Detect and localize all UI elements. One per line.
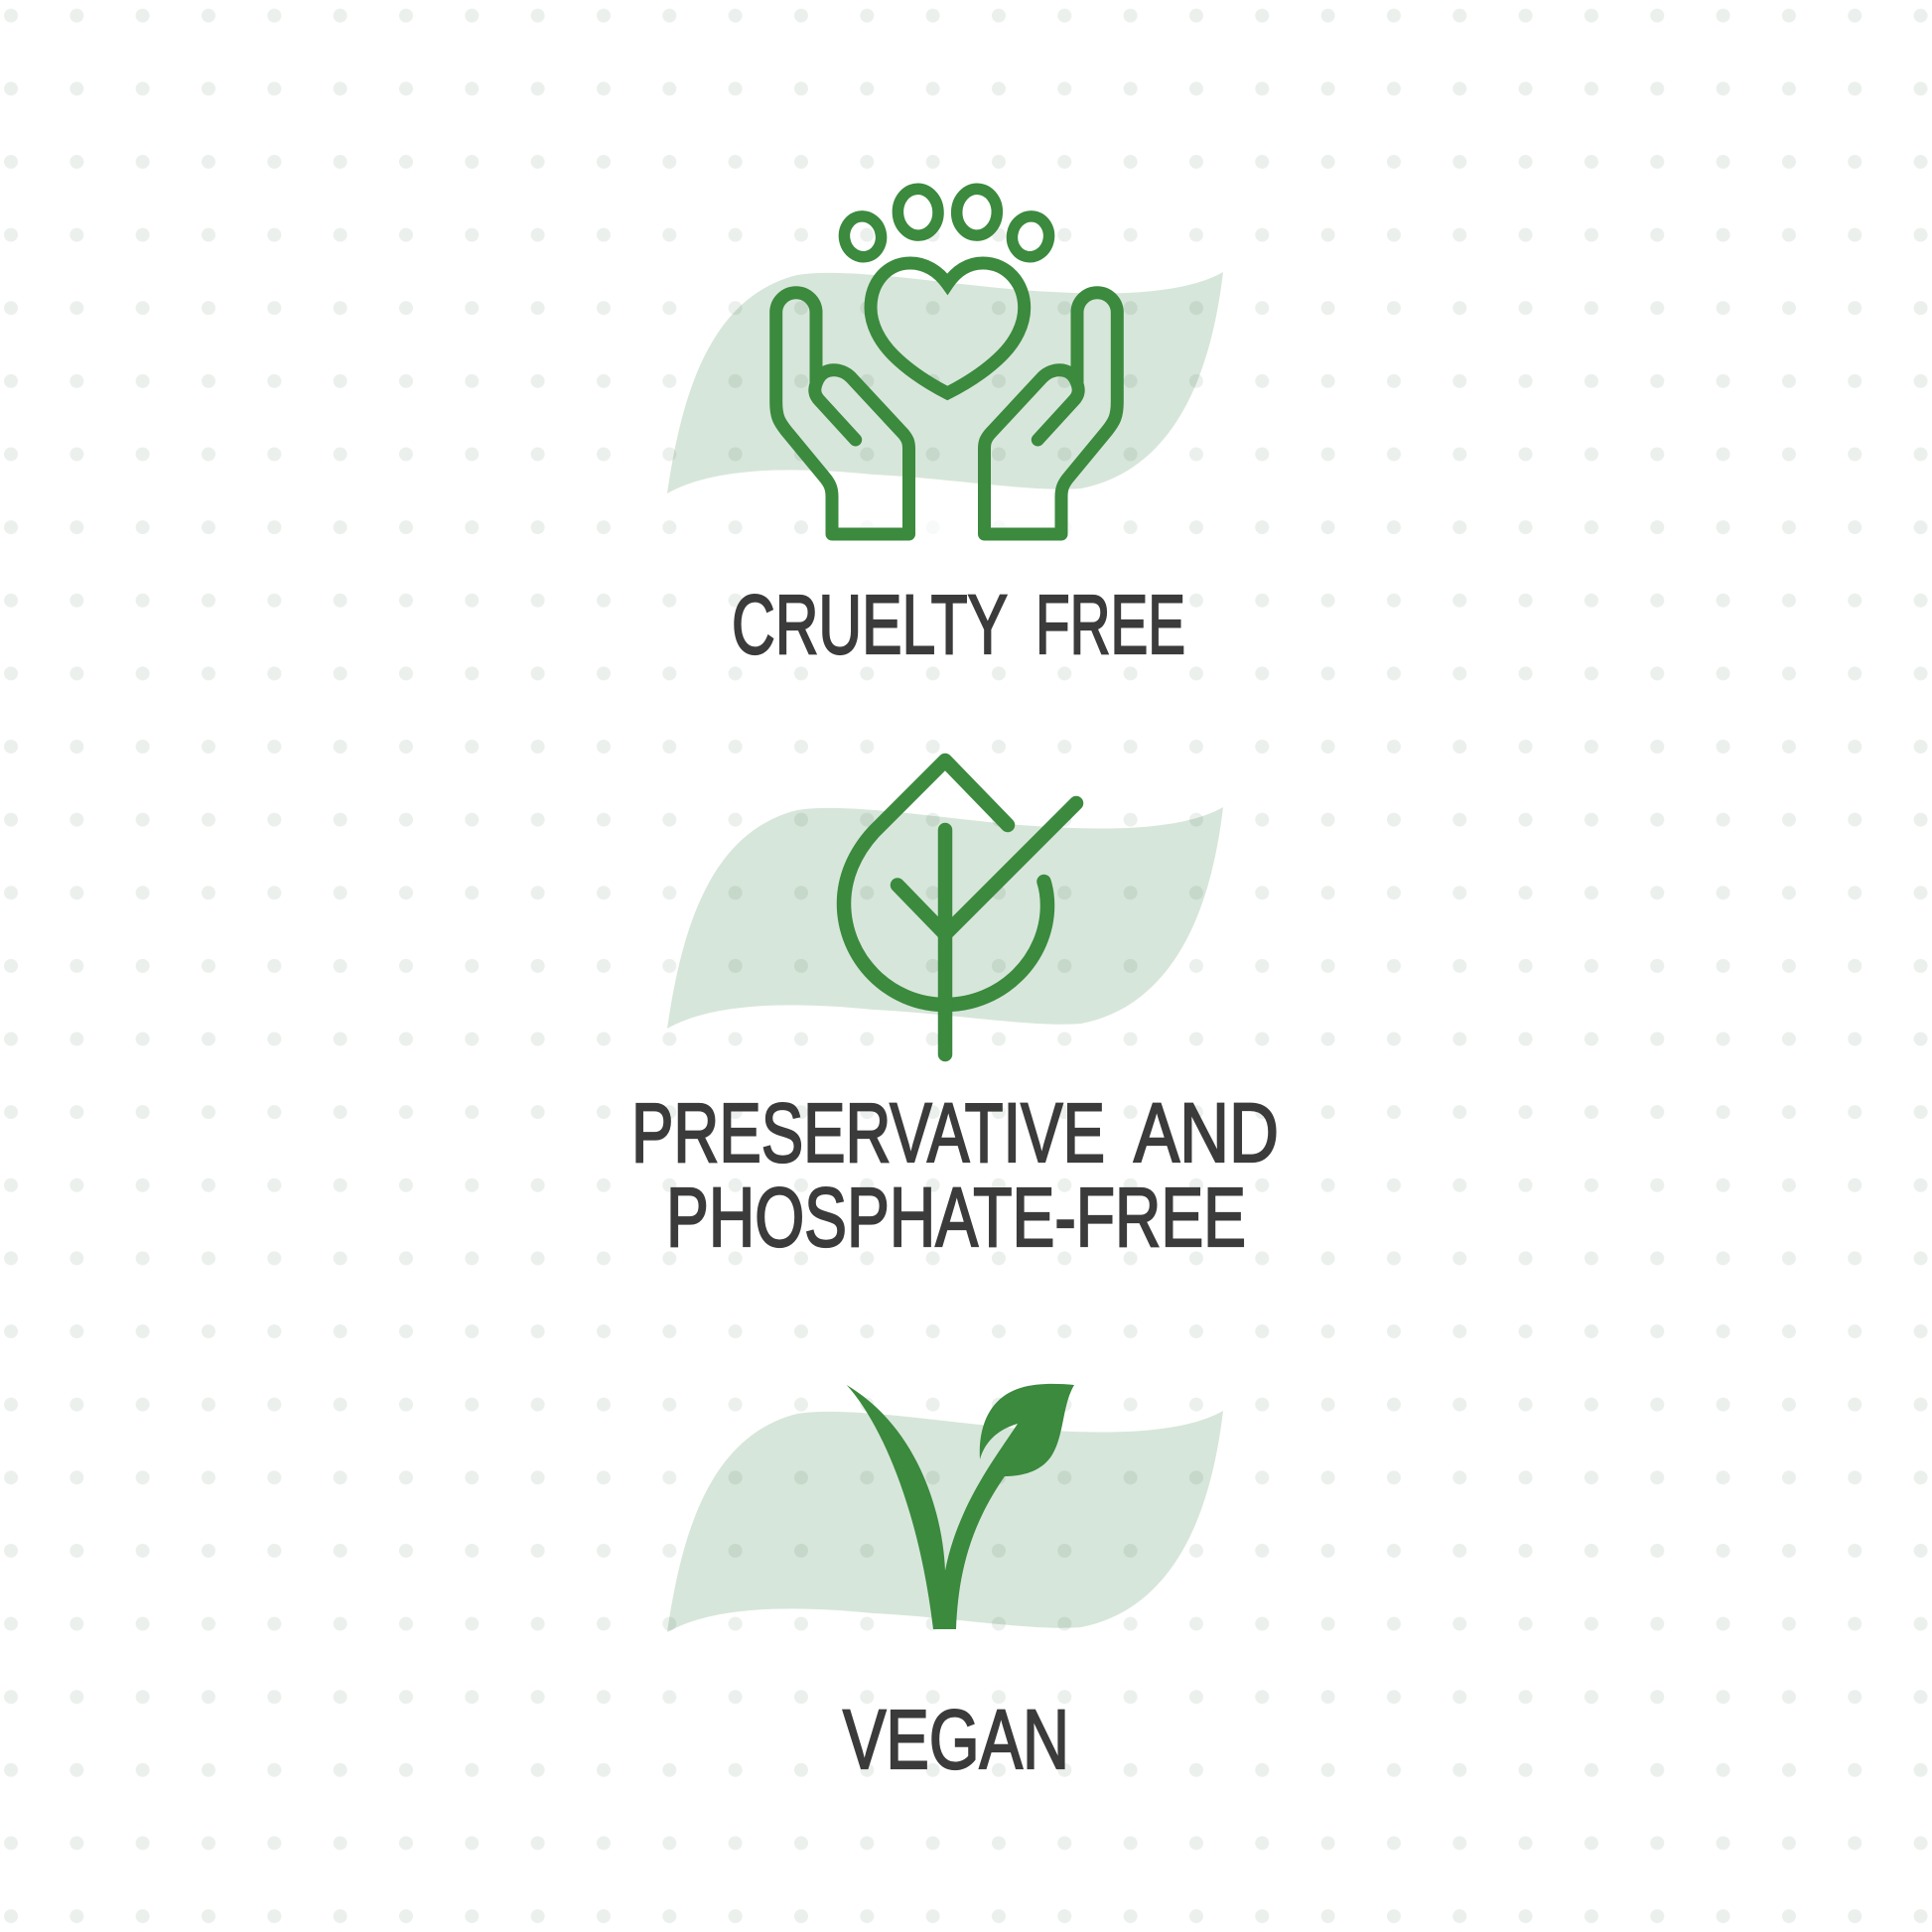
icon: V sprout [847, 1384, 1074, 1629]
label: preservative and phosphate-free [631, 1086, 1279, 1264]
icon: leaf with check mark [844, 760, 1076, 1054]
panel: vegan [667, 1384, 1223, 1786]
background wave band [667, 272, 1223, 493]
label: preservative and phosphate-free: PHOSPHATE-FREE [666, 1171, 1246, 1264]
panel: preservative and phosphate-free [631, 760, 1279, 1264]
label: vegan: VEGAN [843, 1693, 1069, 1786]
label: cruelty free: CRUELTY [732, 578, 1008, 671]
background wave band [667, 807, 1223, 1029]
label: preservative and phosphate-free: PRESERVATIVE [631, 1086, 1105, 1179]
icon: hands holding heart and paw [776, 188, 1117, 534]
label: cruelty free: FREE [1035, 578, 1185, 671]
panel: cruelty free [667, 188, 1223, 671]
label: preservative and phosphate-free: AND [1134, 1086, 1279, 1179]
background wave band [667, 1411, 1223, 1632]
